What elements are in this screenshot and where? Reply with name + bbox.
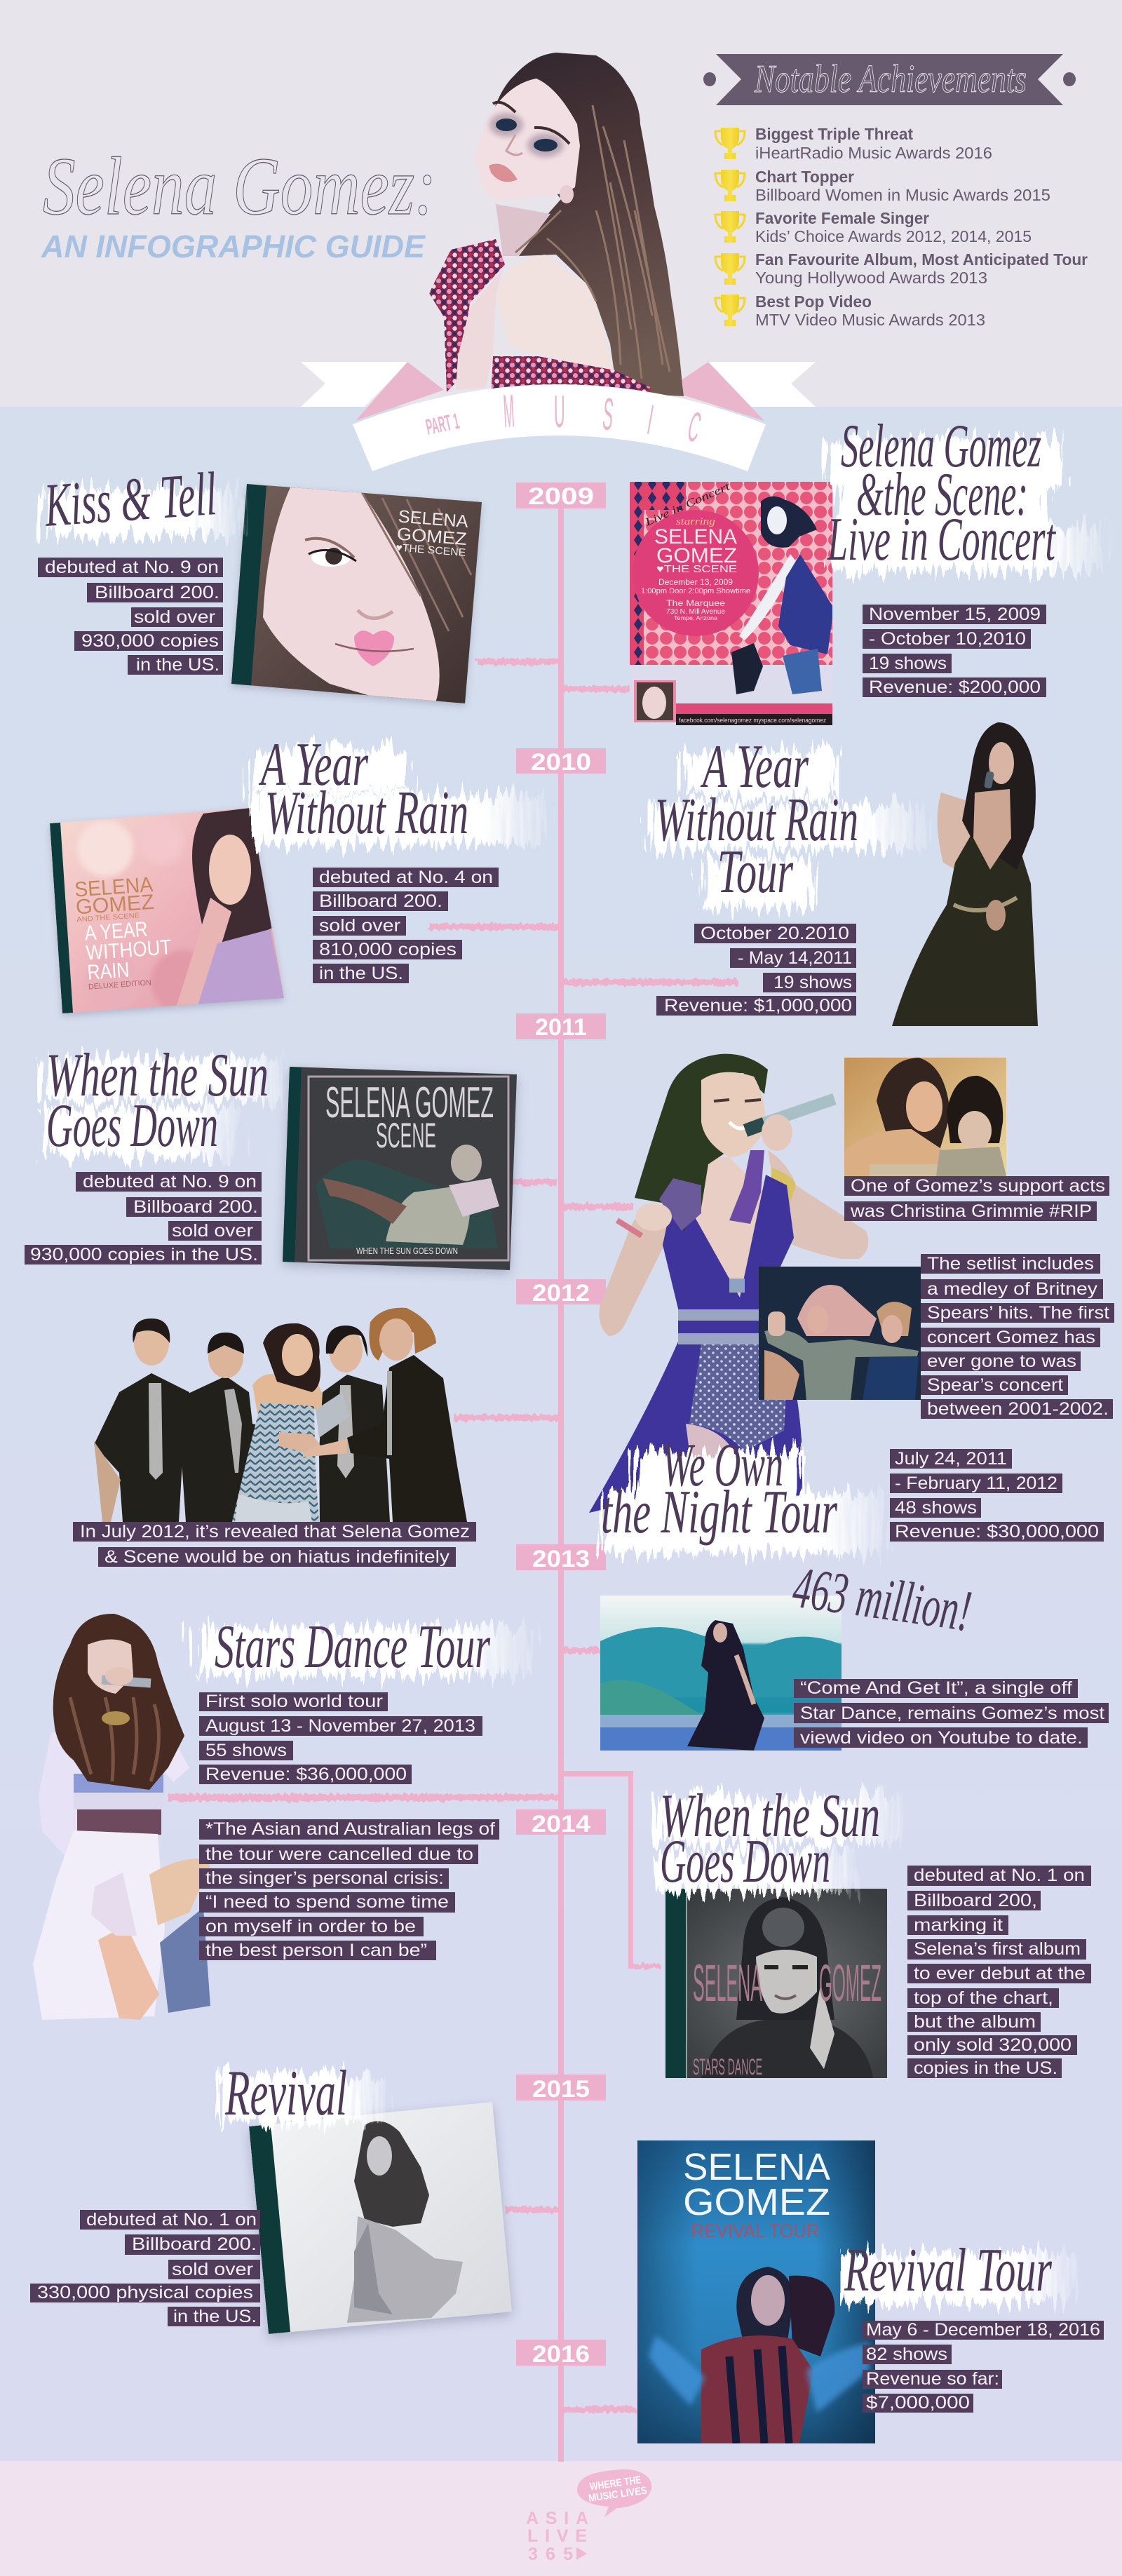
album stats: Stars Dance: Selena’s first album bbox=[914, 1939, 1081, 1959]
album stats: Revival: Billboard 200. bbox=[132, 2234, 257, 2254]
tour stats: We Own the Night Tour: July 24, 2011 bbox=[895, 1449, 1007, 1469]
album cover: When the Sun Goes Down bbox=[283, 1067, 517, 1270]
year 2012 bbox=[516, 1279, 606, 1307]
footer logo: Asia Live 365: MUSIC LIVES bbox=[588, 2484, 648, 2504]
award: Biggest Triple Threat bbox=[755, 125, 992, 162]
setlist note: ever gone to was bbox=[927, 1351, 1076, 1371]
setlist note: Spears’ hits. The first bbox=[927, 1303, 1109, 1323]
poster: Live in Concert: The Marquee bbox=[666, 598, 725, 608]
award: Biggest Triple Threat: iHeartRadio Music Awards 2016 bbox=[755, 144, 992, 162]
album cover: A Year Without Rain: A YEAR bbox=[84, 918, 149, 945]
poster: Live in Concert: Tempe, Arizona bbox=[674, 615, 718, 621]
tour stats: A Year Without Rain Tour: Revenue: $1,000,000 bbox=[664, 996, 852, 1016]
album stats: Stars Dance bbox=[907, 1866, 1091, 2078]
album cover: Stars Dance: SELENA bbox=[693, 1954, 762, 2012]
album stats: A Year Without Rain: Billboard 200. bbox=[319, 891, 442, 911]
album stats: A Year Without Rain: in the US. bbox=[319, 964, 403, 983]
album stats: Kiss & Tell bbox=[38, 558, 223, 675]
year 2015 bbox=[516, 2075, 606, 2103]
trophy: Favorite Female Singer bbox=[715, 211, 745, 243]
year 2012: 2012 bbox=[532, 1280, 590, 1307]
background: timeline section bbox=[0, 407, 1122, 2462]
year 2009: 2009 bbox=[528, 483, 594, 510]
poster: Revival Tour: SELENA bbox=[683, 2146, 830, 2188]
award: Fan Favourite Album bbox=[755, 250, 1088, 287]
album stats: Stars Dance: top of the chart, bbox=[914, 1988, 1053, 2008]
tour stats: We Own the Night Tour: 48 shows bbox=[895, 1498, 977, 1518]
poster: Live in Concert: December 13, 2009 bbox=[658, 577, 733, 587]
panel: When the Sun Goes Down album bbox=[25, 1041, 517, 1270]
tour stats: Live in Concert: - October 10,2010 bbox=[869, 629, 1026, 649]
brush heading: A Year Without Rain: Without Rain bbox=[265, 779, 468, 847]
brush heading: A Year Without Rain Tour: Without Rain bbox=[655, 786, 858, 854]
album cover: When the Sun Goes Down: WHEN THE SUN GOES DOWN bbox=[356, 1246, 458, 1256]
brush heading: A Year Without Rain bbox=[251, 731, 545, 847]
album stats: Stars Dance: debuted at No. 1 on bbox=[914, 1866, 1085, 1885]
panel: Revival album bbox=[30, 2057, 512, 2334]
award: Favorite Female Singer bbox=[755, 209, 1032, 245]
title bbox=[41, 140, 436, 264]
brush heading: We Own the Night Tour: the Night Tour bbox=[601, 1478, 837, 1546]
note: cancelled tour legs: the best person I can be” bbox=[205, 1941, 427, 1960]
album cover: Kiss & Tell: SELENA bbox=[398, 506, 469, 532]
brush heading: When the Sun Goes Down (Stars Dance): When the Sun bbox=[660, 1782, 880, 1850]
banner: Notable Achievements: Notable Achievements bbox=[754, 58, 1027, 101]
ribbon: Part 1 Music: I bbox=[644, 396, 656, 443]
caption: Come And Get It bbox=[794, 1678, 1109, 1748]
album cover: A Year Without Rain: DELUXE EDITION bbox=[88, 978, 151, 992]
album cover: When the Sun Goes Down: SCENE bbox=[376, 1116, 436, 1155]
note: cancelled tour legs: the singer’s personal crisis: bbox=[205, 1868, 444, 1888]
ribbon: Part 1 Music: PART 1 bbox=[424, 409, 461, 440]
award: Favorite Female Singer: Kids’ Choice Awards 2012, 2014, 2015 bbox=[755, 227, 1032, 245]
photo: Come And Get It video still bbox=[600, 1596, 842, 1751]
brush heading: Kiss & Tell bbox=[41, 460, 240, 540]
year 2014: 2014 bbox=[532, 1811, 590, 1837]
tour stats: Revival Tour: Revenue so far: bbox=[866, 2369, 999, 2389]
brush heading: Selena Gomez & the Scene: Live in Concert bbox=[827, 412, 1104, 574]
footer logo: Asia Live 365: WHERE THE bbox=[589, 2474, 642, 2493]
album cover: When the Sun Goes Down: SELENA GOMEZ bbox=[325, 1079, 494, 1127]
brush heading: A Year Without Rain Tour: Tour bbox=[717, 838, 793, 906]
inset photo: Britney Spears concert bbox=[759, 1267, 921, 1401]
award: Best Pop Video: Best Pop Video bbox=[755, 292, 872, 311]
tour stats: We Own the Night Tour: Revenue: $30,000,000 bbox=[895, 1522, 1099, 1542]
note: cancelled tour legs: on myself in order to be bbox=[205, 1917, 416, 1936]
poster: Revival Tour: GOMEZ bbox=[683, 2181, 830, 2223]
tour stats: Revival Tour: May 6 - December 18, 2016 bbox=[866, 2320, 1100, 2340]
poster: Live in Concert: 1:00pm Door 2:00pm Showtime bbox=[641, 587, 750, 595]
note: cancelled tour legs bbox=[199, 1819, 499, 1960]
brush heading: Kiss & Tell: Kiss & Tell bbox=[41, 460, 219, 540]
album cover: A Year Without Rain: SELENA bbox=[74, 873, 154, 902]
trophy: Best Pop Video bbox=[715, 295, 745, 326]
caption: Come And Get It: “Come And Get It”, a single off bbox=[800, 1678, 1072, 1698]
year 2011 bbox=[516, 1013, 606, 1041]
album cover: Kiss & Tell bbox=[231, 484, 482, 705]
award: Biggest Triple Threat: Biggest Triple Threat bbox=[755, 125, 913, 143]
album cover: Revival bbox=[249, 2102, 512, 2334]
poster: Live in Concert: 730 N. Mill Avenue bbox=[666, 608, 725, 616]
poster: Revival Tour: REVIVAL TOUR bbox=[691, 2220, 819, 2241]
album stats: Stars Dance: marking it bbox=[914, 1915, 1003, 1935]
ribbon: Part 1 Music: M bbox=[502, 386, 515, 438]
timeline trunk bbox=[558, 505, 564, 2462]
photo: Selena kneeling in white bbox=[33, 1614, 210, 2020]
tour stats: Live in Concert: 19 shows bbox=[869, 654, 947, 673]
poster: Revival Tour bbox=[637, 2140, 875, 2443]
album cover: A Year Without Rain: WITHOUT bbox=[85, 936, 172, 965]
tour stats: Live in Concert: November 15, 2009 bbox=[869, 605, 1041, 624]
album stats: Revival: sold over bbox=[172, 2260, 253, 2279]
award: Chart Topper bbox=[755, 168, 1050, 204]
album stats: Kiss & Tell: debuted at No. 9 on bbox=[45, 558, 219, 577]
album stats: Kiss & Tell: Billboard 200. bbox=[95, 583, 219, 602]
poster: Live in Concert: GOMEZ bbox=[656, 544, 737, 567]
tour stats: We Own the Night Tour: - February 11, 2012 bbox=[895, 1474, 1057, 1493]
brush heading: We Own the Night Tour: We Own bbox=[662, 1431, 783, 1499]
album stats: Revival: in the US. bbox=[173, 2307, 257, 2326]
photo: Selena on stage in blue dress bbox=[589, 1054, 868, 1513]
panel: Stars Dance album bbox=[654, 1782, 1091, 2079]
year 2010: 2010 bbox=[531, 749, 591, 776]
setlist note: The setlist includes bbox=[927, 1254, 1094, 1274]
tour stats: Stars Dance Tour: Revenue: $36,000,000 bbox=[205, 1765, 407, 1784]
brush heading: When the Sun Goes Down: When the Sun bbox=[46, 1041, 269, 1110]
tour stats: A Year Without Rain Tour: - May 14,2011 bbox=[738, 948, 852, 968]
album stats: Revival: 330,000 physical copies bbox=[37, 2283, 253, 2302]
footer logo: Asia Live 365 bbox=[526, 2469, 651, 2564]
setlist note: concert Gomez has bbox=[927, 1328, 1095, 1347]
year 2014 bbox=[516, 1809, 606, 1837]
album stats: When the Sun Goes Down: debuted at No. 9 on bbox=[83, 1172, 257, 1192]
poster: Live in Concert: ♥THE SCENE bbox=[656, 563, 737, 575]
tour stats: Stars Dance Tour: August 13 - November 27, 2013 bbox=[205, 1716, 475, 1736]
album cover: A Year Without Rain bbox=[50, 808, 284, 1013]
year 2016 bbox=[516, 2340, 606, 2368]
panel: band on hiatus bbox=[73, 1308, 476, 1567]
album stats: Stars Dance: to ever debut at the bbox=[914, 1964, 1086, 1983]
album stats: Kiss & Tell: sold over bbox=[134, 607, 215, 627]
brush heading: When the Sun Goes Down (Stars Dance): Goes Down bbox=[660, 1828, 830, 1896]
ribbon tails bbox=[301, 362, 816, 421]
caption: Christina Grimmie: One of Gomez’s support acts bbox=[851, 1176, 1105, 1196]
tour stats: A Year Without Rain Tour bbox=[656, 924, 856, 1016]
tour stats: A Year Without Rain Tour: 19 shows bbox=[773, 973, 852, 992]
award: Chart Topper: Billboard Women in Music Awards 2015 bbox=[755, 186, 1050, 204]
note: cancelled tour legs: the tour were cancelled due to bbox=[205, 1845, 473, 1864]
panel: Stars Dance Tour bbox=[33, 1613, 533, 2020]
award: Fan Favourite Album: Young Hollywood Awards 2013 bbox=[755, 269, 987, 287]
tour stats: Live in Concert: Revenue: $200,000 bbox=[869, 677, 1041, 697]
album stats: A Year Without Rain: sold over bbox=[319, 916, 400, 936]
album cover: Stars Dance bbox=[665, 1889, 887, 2079]
award: Fan Favourite Album: Fan Favourite Album, Most Anticipated Tour bbox=[755, 250, 1088, 269]
album stats: Stars Dance: copies in the US. bbox=[914, 2058, 1057, 2078]
timeline branches bbox=[168, 659, 737, 2413]
ribbon: Part 1 Music bbox=[353, 384, 766, 471]
panel: Stars Dance album: GOMEZ bbox=[819, 1954, 881, 2012]
year 2011: 2011 bbox=[535, 1014, 587, 1041]
footer logo: Asia Live 365: LIVE bbox=[527, 2526, 587, 2546]
album stats: Kiss & Tell: 930,000 copies bbox=[81, 631, 219, 651]
banner: Notable Achievements bbox=[703, 54, 1076, 105]
achievements list bbox=[715, 125, 1088, 329]
album cover: Stars Dance: STARS DANCE bbox=[693, 2054, 762, 2079]
ribbon: Part 1 Music: C bbox=[684, 403, 705, 451]
trophy: Biggest Triple Threat bbox=[715, 128, 745, 159]
caption: Christina Grimmie: was Christina Grimmie #RIP bbox=[850, 1201, 1092, 1221]
brush heading: A Year Without Rain: A Year bbox=[259, 731, 368, 799]
photo: Selena Gomez & the Scene band bbox=[94, 1308, 467, 1522]
tour stats: Stars Dance Tour: 55 shows bbox=[205, 1741, 287, 1760]
poster: Live in Concert: starring bbox=[676, 516, 716, 527]
award: Best Pop Video bbox=[755, 292, 985, 329]
brush heading: A Year Without Rain Tour: A Year bbox=[701, 733, 809, 801]
brush heading: When the Sun Goes Down: Goes Down bbox=[46, 1092, 218, 1160]
tour stats: Revival Tour: 82 shows bbox=[866, 2345, 947, 2364]
caption: Come And Get It: Star Dance, remains Gomez’s most bbox=[800, 1704, 1104, 1723]
setlist note: a medley of Britney bbox=[927, 1279, 1098, 1299]
title: AN INFOGRAPHIC GUIDE bbox=[41, 229, 426, 264]
album stats: When the Sun Goes Down bbox=[25, 1172, 262, 1265]
album stats: A Year Without Rain bbox=[313, 868, 499, 983]
album cover: A Year Without Rain: GOMEZ bbox=[75, 891, 155, 919]
album stats: Stars Dance: Billboard 200, bbox=[914, 1891, 1037, 1910]
tour stats: Stars Dance Tour: First solo world tour bbox=[205, 1692, 383, 1711]
note: cancelled tour legs: “I need to spend some time bbox=[205, 1892, 449, 1912]
year 2009 bbox=[516, 483, 606, 510]
inset photo: Selena with Christina Grimmie bbox=[844, 1058, 1006, 1176]
album stats: A Year Without Rain: 810,000 copies bbox=[319, 940, 457, 959]
album stats: When the Sun Goes Down: sold over bbox=[172, 1221, 253, 1241]
tour stats: We Own the Night Tour bbox=[890, 1449, 1104, 1542]
poster: Live in Concert: SELENA bbox=[654, 525, 737, 548]
note: cancelled tour legs: *The Asian and Australian legs of bbox=[205, 1819, 495, 1839]
ribbon: Part 1 Music: S bbox=[601, 389, 615, 440]
panel: We Own the Night Tour bbox=[589, 1054, 1114, 1553]
brush heading: When the Sun Goes Down bbox=[43, 1041, 285, 1160]
year 2013: 2013 bbox=[532, 1546, 590, 1572]
brush heading: A Year Without Rain Tour bbox=[649, 733, 926, 908]
award: Favorite Female Singer: Favorite Female Singer bbox=[755, 209, 929, 227]
year 2013 bbox=[516, 1544, 606, 1572]
trophy: Fan Favourite Album bbox=[715, 253, 745, 285]
panel: Kiss & Tell album bbox=[38, 460, 482, 705]
footer logo: Asia Live 365: ASIA bbox=[526, 2509, 588, 2528]
caption: band hiatus: & Scene would be on hiatus indefinitely bbox=[104, 1547, 450, 1567]
album stats: Stars Dance: but the album bbox=[914, 2012, 1036, 2032]
footer logo: Asia Live 365: 365 bbox=[528, 2544, 573, 2564]
hero photo: Selena Gomez portrait bbox=[429, 53, 684, 396]
trophy: Chart Topper bbox=[715, 170, 745, 201]
tour stats: Stars Dance Tour bbox=[199, 1692, 482, 1784]
panel: Selena Gomez & the Scene Live in Concert bbox=[630, 412, 1104, 725]
tour stats: Revival Tour bbox=[863, 2320, 1104, 2413]
caption: Christina Grimmie bbox=[844, 1176, 1109, 1221]
brush heading: Stars Dance Tour: Stars Dance Tour bbox=[215, 1613, 490, 1681]
tour stats: A Year Without Rain Tour: October 20.2010 bbox=[701, 924, 849, 943]
tour stats: Revival Tour: $7,000,000 bbox=[866, 2393, 970, 2413]
album stats: Revival: debuted at No. 1 on bbox=[86, 2210, 257, 2230]
caption: band hiatus bbox=[73, 1522, 476, 1567]
tour stats: Live in Concert bbox=[863, 605, 1046, 697]
title: Selena Gomez: bbox=[43, 140, 436, 232]
album cover: Kiss & Tell: ♥THE SCENE bbox=[396, 541, 466, 559]
setlist note bbox=[921, 1254, 1114, 1419]
poster: Live in Concert: facebook.com/selenagomez myspace.com/selenagomez bbox=[679, 717, 826, 724]
background: header bbox=[0, 0, 1122, 407]
year 2016: 2016 bbox=[532, 2341, 590, 2368]
panel: Come And Get It video bbox=[600, 1555, 1109, 1751]
award: Chart Topper: Chart Topper bbox=[755, 168, 854, 186]
background: footer bbox=[0, 2461, 1122, 2576]
album stats: A Year Without Rain: debuted at No. 4 on bbox=[319, 868, 493, 887]
album stats: Revival bbox=[30, 2210, 260, 2326]
setlist note: Spear’s concert bbox=[927, 1375, 1063, 1395]
panel: Revival Tour bbox=[637, 2140, 1104, 2443]
album stats: When the Sun Goes Down: Billboard 200. bbox=[133, 1197, 258, 1217]
panel: A Year Without Rain Tour bbox=[649, 722, 1038, 1026]
brush heading: When the Sun Goes Down (Stars Dance) bbox=[654, 1782, 903, 1896]
brush heading: We Own the Night Tour bbox=[601, 1431, 887, 1553]
callout: 463 million: 463 million! bbox=[789, 1555, 975, 1644]
year 2015: 2015 bbox=[532, 2076, 590, 2103]
panel: A Year Without Rain album bbox=[50, 731, 545, 1013]
album cover: A Year Without Rain: RAIN bbox=[86, 958, 130, 985]
caption: band hiatus: In July 2012, it’s revealed that Selena Gomez bbox=[80, 1522, 470, 1542]
photo: singer in black dress bbox=[892, 722, 1038, 1026]
poster: Live in Concert bbox=[630, 480, 834, 725]
album stats: When the Sun Goes Down: 930,000 copies in the US. bbox=[30, 1245, 258, 1265]
year 2010 bbox=[516, 748, 606, 776]
award: Best Pop Video: MTV Video Music Awards 2013 bbox=[755, 311, 985, 329]
caption: Come And Get It: viewd video on Youtube to date. bbox=[800, 1728, 1083, 1748]
setlist note: between 2001-2002. bbox=[927, 1399, 1109, 1419]
album stats: Stars Dance: only sold 320,000 bbox=[914, 2035, 1072, 2055]
album cover: A Year Without Rain: AND THE SCENE bbox=[76, 912, 140, 924]
album stats: Kiss & Tell: in the US. bbox=[136, 655, 219, 675]
brush heading: Revival: Revival bbox=[224, 2057, 347, 2129]
album cover: Kiss & Tell: GOMEZ bbox=[396, 524, 468, 549]
poster: Live in Concert: Live in Concert bbox=[643, 480, 732, 529]
ribbon: Part 1 Music: U bbox=[554, 386, 565, 438]
